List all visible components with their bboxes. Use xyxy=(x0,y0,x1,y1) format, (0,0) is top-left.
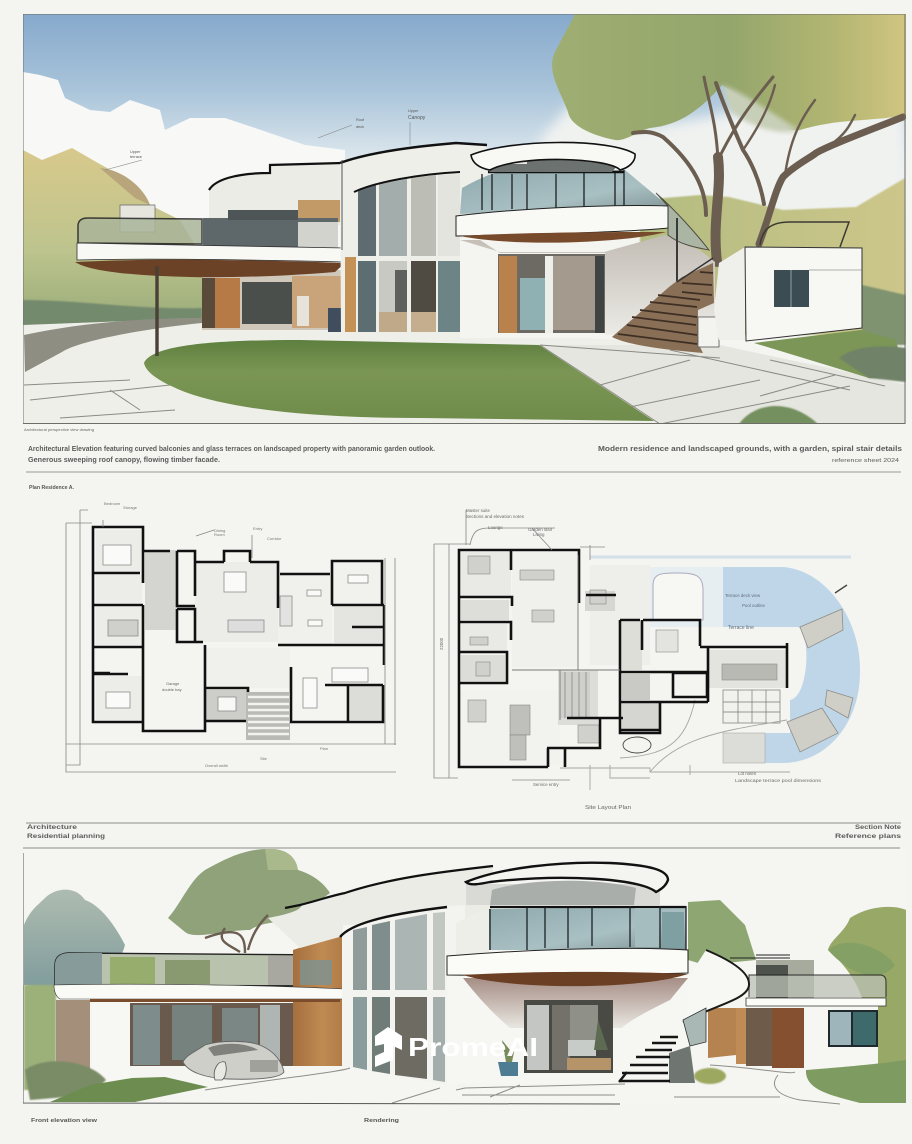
panel: bottom street elevation illustration xyxy=(23,849,906,1110)
labels: Garden stair xyxy=(528,527,553,532)
annex side xyxy=(714,247,745,340)
clouds xyxy=(24,72,345,198)
floor plan right xyxy=(434,508,860,790)
soffit xyxy=(75,260,345,277)
caption right: Section Note xyxy=(855,824,902,831)
blue water / terrace zone xyxy=(723,567,860,763)
slab xyxy=(54,984,344,999)
watermark xyxy=(375,1027,538,1067)
right wall xyxy=(460,238,620,338)
door xyxy=(524,1000,613,1073)
labels: Service entry xyxy=(533,782,559,787)
left tree xyxy=(24,890,125,990)
staircase xyxy=(246,692,290,740)
pin xyxy=(835,585,847,593)
balcony band xyxy=(456,205,668,236)
garage label xyxy=(162,681,182,692)
base paper xyxy=(23,849,906,1105)
center tree xyxy=(168,849,330,953)
tower glass lower xyxy=(358,261,460,332)
dimension lines xyxy=(66,510,396,772)
dimension labels: Entry xyxy=(253,526,262,531)
dimensions xyxy=(434,510,605,780)
description right: Modern residence and landscaped grounds, with a garden, spiral stair details xyxy=(598,444,902,453)
under-balcony shadow xyxy=(463,978,688,1028)
annex window xyxy=(774,270,862,307)
black stair steps xyxy=(619,1037,678,1082)
left balcony railing xyxy=(78,218,202,244)
caption left: Architecture xyxy=(27,824,77,831)
planter xyxy=(498,1040,518,1076)
sky xyxy=(24,14,906,176)
callouts top: deck xyxy=(356,125,364,129)
annex rail xyxy=(760,222,849,247)
walls xyxy=(459,550,787,767)
right lawn xyxy=(754,330,905,378)
car xyxy=(183,1041,284,1080)
dimension labels: Corridor xyxy=(267,536,282,541)
labels: Lounge xyxy=(488,525,503,530)
roof canopy xyxy=(466,863,668,892)
callouts top: Canopy xyxy=(408,115,426,121)
description left xyxy=(28,444,435,464)
side rail glass xyxy=(656,193,709,250)
caption bottom left: Front elevation view xyxy=(31,1118,98,1124)
wood strip xyxy=(345,257,356,332)
pale garden fill xyxy=(590,557,851,665)
callouts top: Roof xyxy=(356,118,365,122)
interior fills xyxy=(460,552,786,765)
timber xyxy=(293,934,342,1066)
frame xyxy=(23,14,905,424)
right lawn xyxy=(806,1060,906,1103)
caption plan right: Site Layout Plan xyxy=(585,805,631,811)
dimension labels: Plan xyxy=(320,746,328,751)
stair stone xyxy=(669,1046,695,1083)
callouts top: Upper xyxy=(408,109,419,113)
dimension labels: Site xyxy=(260,756,268,761)
description right xyxy=(598,444,902,464)
annotation on water xyxy=(725,593,766,631)
spiral stairs xyxy=(612,263,714,353)
panel: top perspective illustration xyxy=(23,14,906,424)
lower utility room xyxy=(723,733,765,763)
driveway lines xyxy=(205,1065,840,1110)
caption left xyxy=(27,824,105,840)
upper clerestory xyxy=(466,884,660,905)
garage label: Garage xyxy=(166,681,180,686)
balcony band xyxy=(447,948,688,975)
central volume xyxy=(447,975,690,1086)
grid room xyxy=(723,690,780,723)
stair glass xyxy=(683,1008,706,1046)
annex deck xyxy=(746,998,886,1006)
description right: reference sheet 2024 xyxy=(832,458,899,464)
thin walls xyxy=(512,555,620,720)
annotation on water: Pool outline xyxy=(742,603,766,608)
dimension labels: Storage xyxy=(123,505,138,510)
caption bottom center: Rendering xyxy=(364,1118,400,1124)
tower xyxy=(340,905,465,1088)
floor plan left xyxy=(66,501,396,772)
ground and paths xyxy=(23,318,906,424)
labels: 22000 xyxy=(439,637,444,650)
caption right xyxy=(835,824,902,840)
balcony glass xyxy=(55,953,333,986)
curved upper wall xyxy=(268,866,493,948)
lawn xyxy=(50,1077,208,1102)
labels: Landscape terrace pool dimensions xyxy=(735,778,822,783)
shrubs xyxy=(25,1061,106,1100)
stone base xyxy=(56,1000,90,1078)
tower glass upper xyxy=(354,172,460,256)
pale sky behind tree xyxy=(538,104,906,182)
room fills xyxy=(96,530,382,720)
watermark text: PromeAI xyxy=(408,1032,538,1062)
tower glass xyxy=(353,912,445,1082)
callouts top xyxy=(105,109,426,170)
annex box xyxy=(745,247,862,341)
bush at stair xyxy=(694,1068,726,1084)
dimension labels: Bedroom xyxy=(104,501,121,506)
garden curve and lines xyxy=(560,700,790,790)
dimension labels: Dining xyxy=(214,528,225,533)
description left: Generous sweeping roof canopy, flowing timber facade. xyxy=(28,455,220,464)
walls xyxy=(93,527,385,731)
left balcony slab xyxy=(77,243,345,262)
annex timber xyxy=(708,1008,804,1068)
right annex wall xyxy=(806,1006,878,1068)
garage label: double bay xyxy=(162,687,182,692)
labels: Master suite xyxy=(466,508,490,513)
caption right: Reference plans xyxy=(835,833,902,840)
lawn xyxy=(144,340,654,421)
furniture xyxy=(103,545,368,711)
upper balcony glass xyxy=(489,906,686,950)
arched pool room xyxy=(653,573,703,620)
tree trunks xyxy=(633,77,903,262)
soffit xyxy=(90,999,340,1002)
canopy ceiling xyxy=(488,160,616,172)
foliage hill right xyxy=(640,178,906,345)
door xyxy=(498,254,605,333)
tree canopy xyxy=(552,14,906,140)
caption left: Residential planning xyxy=(27,833,105,840)
section label: Plan Residence A. xyxy=(29,485,74,491)
green background left xyxy=(24,985,56,1090)
annex upper box xyxy=(730,955,814,998)
balcony soffit xyxy=(460,232,666,243)
dimension labels xyxy=(104,501,328,768)
dimension labels: Overall width xyxy=(205,763,228,768)
labels xyxy=(439,508,822,787)
ground line xyxy=(23,853,620,1104)
description left: Architectural Elevation featuring curved balconies and glass terraces on landscaped property with panoramic garden outlook. xyxy=(28,444,435,453)
wood accent xyxy=(298,200,340,222)
foliage hill left xyxy=(23,148,205,335)
furniture xyxy=(468,556,777,760)
upper window xyxy=(203,218,338,248)
icon: logo xyxy=(375,1027,402,1067)
annotation on water: Terrace deck view xyxy=(725,593,761,598)
trees behind stair xyxy=(688,900,756,965)
wall xyxy=(92,999,130,1080)
callouts top: Upper xyxy=(130,150,141,154)
glazing xyxy=(130,1003,293,1066)
annotation on water: Terrace line xyxy=(728,625,754,631)
house top view xyxy=(75,142,906,424)
roof canopy xyxy=(471,142,635,170)
balcony left white xyxy=(456,909,489,955)
white step block xyxy=(698,317,719,347)
right tree group xyxy=(828,907,906,1075)
upper round balcony xyxy=(460,170,668,214)
central tower xyxy=(340,143,487,336)
stair xyxy=(560,672,590,718)
spiral stair white band xyxy=(686,950,748,1020)
ground floor left xyxy=(202,270,354,330)
column xyxy=(155,266,159,356)
annex rail xyxy=(749,975,886,997)
radial deck pieces xyxy=(787,609,853,752)
left wing xyxy=(25,934,344,1102)
labels: Living xyxy=(533,532,545,537)
callouts top: terrace xyxy=(130,155,142,159)
wood soffit xyxy=(463,972,688,986)
labels: Lot notes xyxy=(738,771,757,776)
labels: Sections and elevation notes xyxy=(466,514,525,519)
annex window xyxy=(828,1010,878,1047)
bushes xyxy=(839,346,906,382)
left upper volume xyxy=(209,163,342,225)
caption under top illustration: Architectural perspective view drawing xyxy=(24,428,94,432)
dimension labels: Room xyxy=(214,532,225,537)
